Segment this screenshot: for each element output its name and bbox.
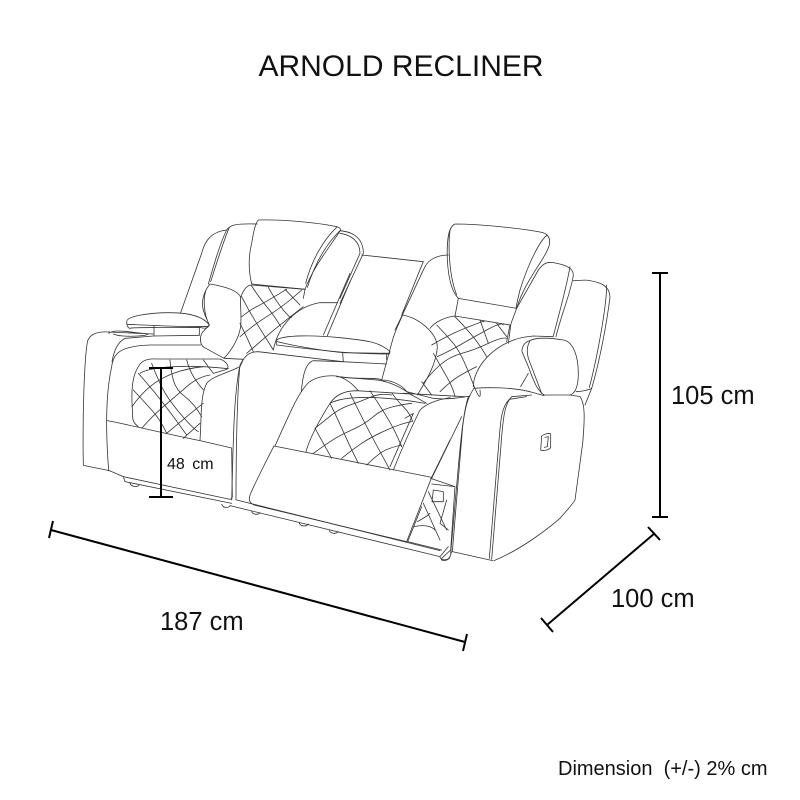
footnote: dimension tolerance: Dimension (+/-) 2% cm (558, 758, 768, 780)
dimension: width 187 cm (49, 521, 467, 651)
sofa illustration (83, 220, 610, 561)
center section and footrest (230, 336, 450, 560)
dimension: height 105 cm (652, 273, 755, 517)
back cushion quilting (240, 286, 300, 352)
title: ARNOLD RECLINER (258, 50, 544, 83)
right seat quilting (315, 391, 413, 470)
seat cushion quilting (132, 359, 228, 413)
right back cushion quilting (422, 317, 507, 397)
left seat section (83, 220, 350, 508)
dimension: seat height 48 cm (149, 367, 214, 497)
dimension: depth 100 cm: 100 cm (611, 585, 695, 613)
right seat section (340, 224, 610, 561)
dimension: seat height 48 cm: 48 cm (167, 456, 214, 473)
dimension: height 105 cm: 105 cm (671, 382, 755, 410)
dimension: width 187 cm: 187 cm (160, 608, 244, 636)
dimension: depth 100 cm (541, 527, 695, 632)
